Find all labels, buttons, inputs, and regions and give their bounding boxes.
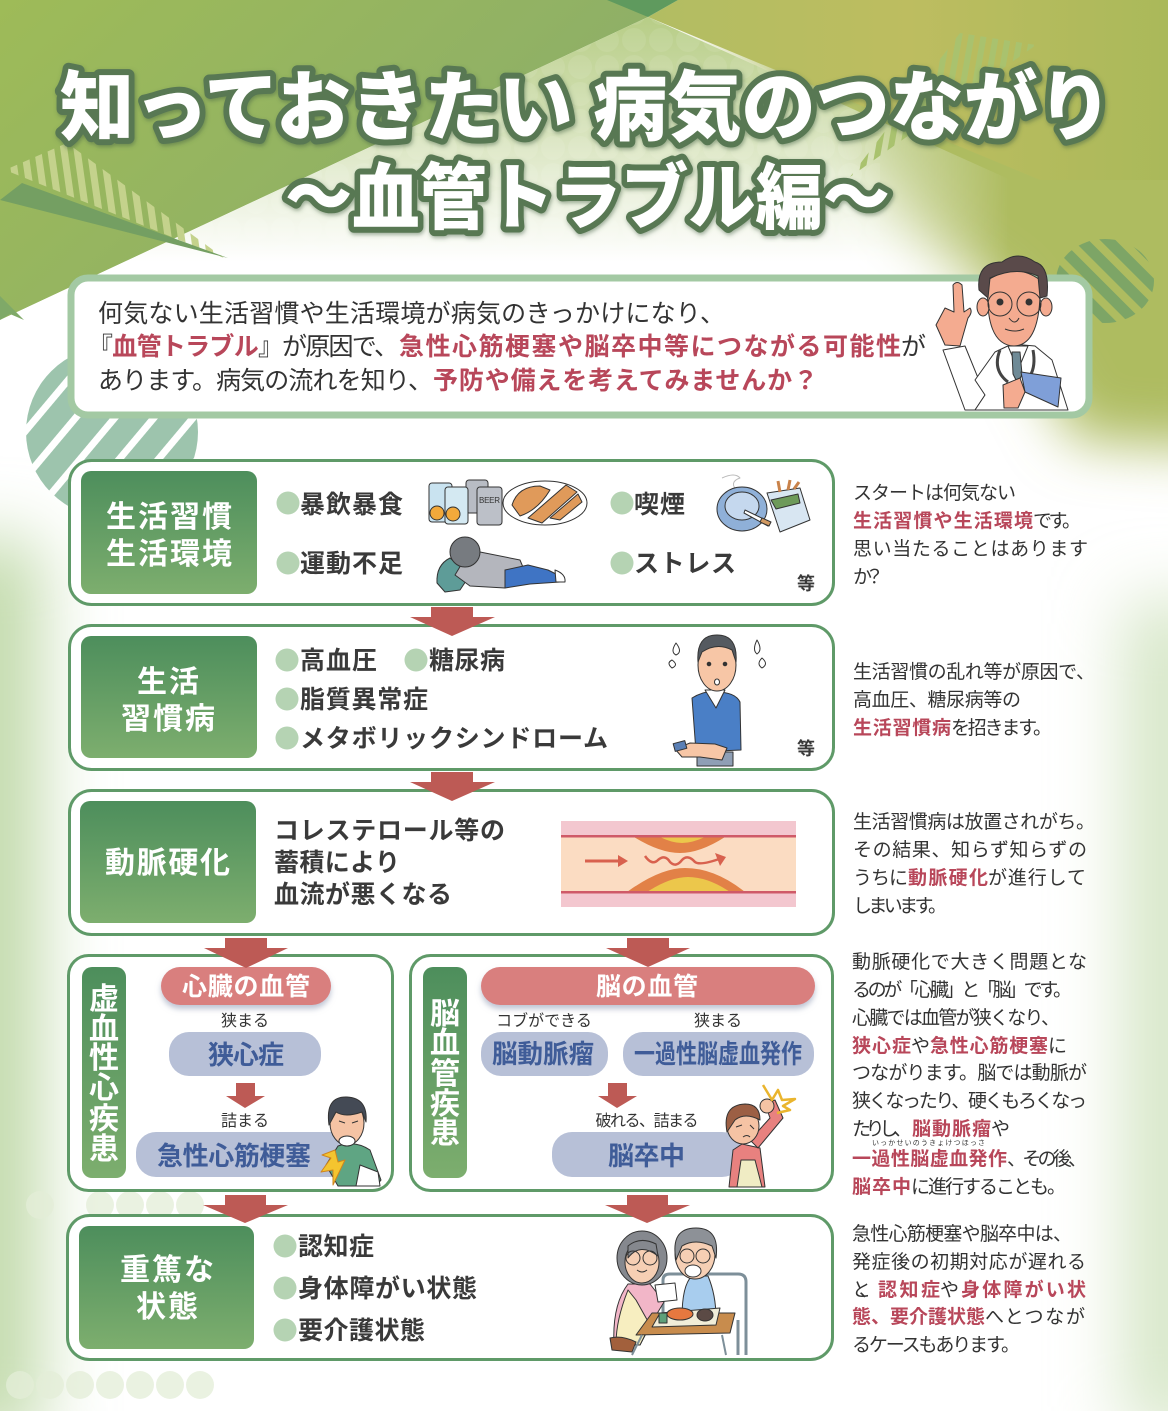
vertical label <box>82 967 126 1178</box>
pill: angina <box>169 1032 321 1076</box>
side note 4: に進行することも。 <box>911 1176 1066 1198</box>
side note 1: スタートは何気ない <box>853 482 1016 504</box>
caption: 狭まる <box>694 1012 742 1030</box>
label: lifestyle diseases: 習慣病 <box>121 703 215 736</box>
intro text: が <box>901 333 926 361</box>
side note 1: です。 <box>1033 511 1081 532</box>
side note 4: 心臓では血管が狭くなり、 <box>852 1007 1060 1029</box>
label: lifestyle: 生活習慣 <box>106 501 232 534</box>
side note 3: うちに <box>853 868 908 889</box>
list: conditions <box>274 1233 477 1345</box>
caption: コブができる <box>496 1011 592 1030</box>
side note 5: へとつなが <box>985 1306 1085 1328</box>
panel: intro message <box>71 256 1089 415</box>
side note 4: 狭心症 <box>852 1035 911 1057</box>
list: diseases: 等 <box>797 738 815 759</box>
list: diseases <box>276 647 815 759</box>
list: lifestyle factors: 運動不足 <box>300 550 403 578</box>
list: conditions: 要介護状態 <box>298 1317 425 1345</box>
label: lifestyle diseases: 生活 <box>137 666 199 699</box>
side note 4: つながります。脳では動脈が <box>852 1062 1087 1084</box>
text: arteriosclerosis description: 血流が悪くなる <box>274 880 452 909</box>
list: diseases: 高血圧 <box>300 647 377 675</box>
icon: doctor pointing <box>936 256 1068 410</box>
intro text: 『血管トラブル』 <box>88 333 283 361</box>
side note 5 <box>852 1223 1086 1356</box>
side note 5: 態、要介護状態 <box>852 1305 985 1328</box>
side note 4: たりし、 <box>852 1119 912 1140</box>
side note 3 <box>853 811 1095 917</box>
pill: cerebral aneurysm: 脳動脈瘤 <box>492 1039 594 1069</box>
vertical label: 疾 <box>430 1088 460 1121</box>
heading pill: heart vessels: 心臓の血管 <box>182 973 310 1001</box>
icon: worried man <box>669 635 766 766</box>
panel: lifestyle habits and environment <box>70 460 834 604</box>
title: 知っておきたい 病気のつながり <box>60 66 1112 151</box>
label: arteriosclerosis <box>80 801 256 923</box>
side note 5: や <box>940 1279 959 1301</box>
label: severe conditions: 状態 <box>136 1291 198 1324</box>
side note 4: や <box>911 1035 930 1057</box>
pill: transient ischemic attack <box>623 1032 814 1076</box>
side note 3: しまいます。 <box>853 896 947 917</box>
text: arteriosclerosis description: コレステロール等の <box>274 817 505 845</box>
title <box>60 66 1112 239</box>
arrow <box>203 1195 288 1223</box>
intro text <box>88 300 926 395</box>
side note 3: その結果、知らず知らずの <box>853 839 1087 861</box>
list: diseases: メタボリックシンドローム <box>300 725 608 753</box>
icon: elderly couple having a meal in bed <box>610 1228 746 1355</box>
label: lifestyle diseases <box>81 636 257 758</box>
side note 1: 思い当たることはあります <box>853 538 1088 560</box>
side note 5: 発症後の初期対応が遅れる <box>852 1251 1086 1273</box>
intro text: あります。病気の流れを知り、 <box>98 367 433 395</box>
intro text: 急性心筋梗塞や脳卒中等につながる可能性 <box>399 332 901 361</box>
side note 4: 脳動脈瘤 <box>912 1118 991 1140</box>
arrow <box>410 772 495 801</box>
label: lifestyle <box>81 471 257 594</box>
panel: cerebrovascular disease <box>410 956 832 1190</box>
side note 4: 一過性脳虚血発作 <box>852 1148 1007 1170</box>
side note 1: 生活習慣や生活環境 <box>853 510 1033 532</box>
intro text: が原因で、 <box>282 333 399 361</box>
heading pill: brain vessels <box>481 967 815 1005</box>
arrow small <box>598 1083 637 1108</box>
heading pill: brain vessels: 脳の血管 <box>596 973 698 1001</box>
side note 2: 生活習慣病 <box>853 717 951 739</box>
arrow <box>606 938 690 967</box>
icon: person lying down <box>437 537 565 592</box>
side note 4: や <box>991 1118 1010 1140</box>
panel: lifestyle diseases <box>70 626 834 770</box>
decorative leaves and striped circles <box>0 33 1154 518</box>
side note 5: と、 <box>852 1280 878 1301</box>
caption: 詰まる <box>221 1112 269 1130</box>
panel: arteriosclerosis <box>70 790 834 934</box>
panel: severe conditions <box>68 1216 832 1360</box>
label: arteriosclerosis: 動脈硬化 <box>105 847 230 880</box>
pill: cerebral aneurysm <box>481 1032 608 1076</box>
side note 4: いっかせいのうきょけつほっさ <box>872 1139 985 1147</box>
icon: man with chest pain <box>321 1097 381 1186</box>
side note 1: か？ <box>853 567 884 588</box>
pill: stroke: 脳卒中 <box>608 1141 685 1171</box>
icon: ashtray and cigarettes <box>717 475 810 532</box>
list: lifestyle factors <box>276 491 815 594</box>
text: arteriosclerosis description: 蓄積により <box>274 849 400 877</box>
vertical label: 虚 <box>89 983 119 1016</box>
vertical label: 血 <box>430 1027 460 1060</box>
side note 4: 脳卒中 <box>852 1176 911 1198</box>
side note 4: 狭くなったり、硬くもろくなっ <box>852 1090 1087 1112</box>
side note 4: 動脈硬化で大きく問題とな <box>852 951 1087 973</box>
icon: drinks and fried food: BEER <box>479 496 500 505</box>
side note 5: 急性心筋梗塞や脳卒中は、 <box>852 1223 1072 1245</box>
list: conditions: 身体障がい状態 <box>298 1274 477 1303</box>
vertical label <box>423 967 467 1178</box>
side note 5: るケースもあります。 <box>852 1335 1020 1356</box>
side note 4: るのが「心臓」と「脳」です。 <box>852 979 1072 1001</box>
label: severe conditions: 重篤な <box>120 1254 214 1287</box>
side note 4: に <box>1048 1036 1067 1057</box>
side note 2: 生活習慣の乱れ等が原因で、 <box>853 661 1095 683</box>
list: conditions: 認知症 <box>298 1233 374 1261</box>
side note 3: 生活習慣病は放置されがち。 <box>853 811 1095 833</box>
pill: angina: 狭心症 <box>208 1040 284 1070</box>
pill: acute myocardial infarction: 急性心筋梗塞 <box>157 1141 311 1171</box>
icon: drinks and fried food <box>429 480 587 525</box>
chart: narrowed artery <box>561 821 796 907</box>
panel: ischemic heart disease <box>68 956 392 1190</box>
vertical label: 患 <box>430 1117 460 1150</box>
side note 2: を招きます。 <box>951 717 1052 739</box>
arrow <box>605 1195 690 1223</box>
side note 5: 認知症 <box>878 1279 940 1301</box>
arrow <box>410 607 495 636</box>
pill: acute myocardial infarction <box>136 1132 351 1177</box>
vertical label: 性 <box>89 1042 119 1075</box>
side note 3: 動脈硬化 <box>908 867 988 889</box>
side note 5: 身体障がい状 <box>961 1278 1086 1301</box>
side note 2: 高血圧、糖尿病等の <box>853 689 1021 711</box>
arrow small <box>226 1083 265 1108</box>
pill: stroke <box>552 1132 742 1177</box>
list: lifestyle factors: 暴飲暴食 <box>300 491 403 519</box>
side note 4 <box>852 951 1087 1198</box>
title: 〜血管トラブル編〜 <box>285 159 890 239</box>
vertical label: 管 <box>430 1058 460 1091</box>
arrow <box>204 938 288 968</box>
label: lifestyle: 生活環境 <box>106 538 232 571</box>
list: diseases: 糖尿病 <box>429 647 505 675</box>
icon: woman with headache <box>726 1085 795 1187</box>
side note 4: 、その後、 <box>1007 1148 1087 1170</box>
side note 2 <box>853 661 1095 739</box>
side note 3: が進行して <box>988 867 1086 889</box>
list: lifestyle factors: ストレス <box>634 550 736 578</box>
vertical label: 患 <box>89 1133 119 1166</box>
intro text: 何気ない生活習慣や生活環境が病気のきっかけになり、 <box>98 300 725 328</box>
pill: transient ischemic attack: 一過性脳虚血発作 <box>634 1039 802 1069</box>
vertical label: 疾 <box>89 1103 119 1136</box>
vertical label: 血 <box>89 1013 119 1046</box>
label: severe conditions <box>79 1226 254 1349</box>
list: diseases: 脂質異常症 <box>300 686 428 714</box>
list: lifestyle factors: 等 <box>797 573 815 594</box>
text: arteriosclerosis description <box>274 817 505 909</box>
list: lifestyle factors: 喫煙 <box>634 491 685 519</box>
vertical label: 心 <box>89 1072 119 1105</box>
caption: 狭まる <box>221 1012 269 1030</box>
vertical label: 脳 <box>430 998 460 1031</box>
side note 4: 急性心筋梗塞 <box>930 1034 1048 1057</box>
caption: 破れる、詰まる <box>596 1112 698 1130</box>
heading pill: heart vessels <box>161 967 331 1005</box>
intro text: 予防や備えを考えてみませんか？ <box>433 367 818 395</box>
side note 1 <box>853 482 1088 588</box>
